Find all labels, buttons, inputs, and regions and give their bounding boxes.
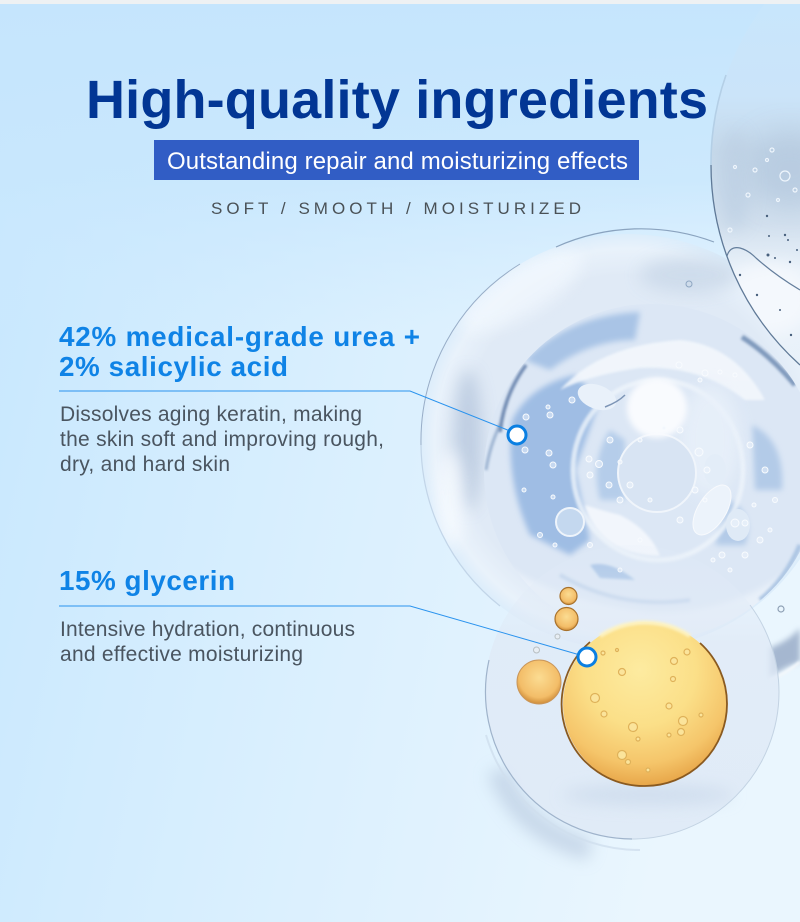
marker: glycerin: [578, 648, 596, 666]
title: High-quality ingredients: [86, 70, 708, 130]
white swirl: [560, 340, 765, 400]
description: urea: dry, and hard skin: [60, 453, 230, 476]
description: glycerin: Intensive hydration, continuous: [60, 618, 355, 641]
subtitle banner: Outstanding repair and moisturizing effects: [167, 148, 628, 175]
illustration: upper right glass lens: [710, 75, 800, 366]
top strip: [0, 0, 800, 4]
description: urea: the skin soft and improving rough,: [60, 428, 384, 451]
illustration: lower glass dish: [485, 545, 800, 850]
blue pools: [510, 375, 600, 555]
leader line: urea: [59, 391, 510, 431]
tagline: SOFT / SMOOTH / MOISTURIZED: [211, 199, 581, 218]
subtitle banner: [154, 140, 639, 180]
leader line: glycerin: [59, 606, 580, 655]
description: glycerin: and effective moisturizing: [60, 643, 303, 666]
illustration: golden oil droplet: [562, 622, 727, 786]
small bubbles: [522, 362, 778, 572]
heading: glycerin: 15% glycerin: [59, 565, 235, 596]
illustration: small oil droplets: [517, 588, 578, 704]
heading: urea and salicylic acid: 42% medical-grade urea +: [59, 321, 420, 352]
callout: glycerin: [59, 565, 596, 666]
illustration: clear gel: [484, 308, 800, 606]
dark refractions: [500, 365, 526, 432]
heading: urea and salicylic acid: 2% salicylic acid: [59, 351, 288, 382]
callout: urea and salicylic acid: [59, 321, 526, 476]
centre bubbles: [618, 434, 696, 512]
description: urea: Dissolves aging keratin, making: [60, 403, 362, 426]
illustration: large glass dish: [420, 229, 800, 650]
marker: urea: [508, 426, 526, 444]
